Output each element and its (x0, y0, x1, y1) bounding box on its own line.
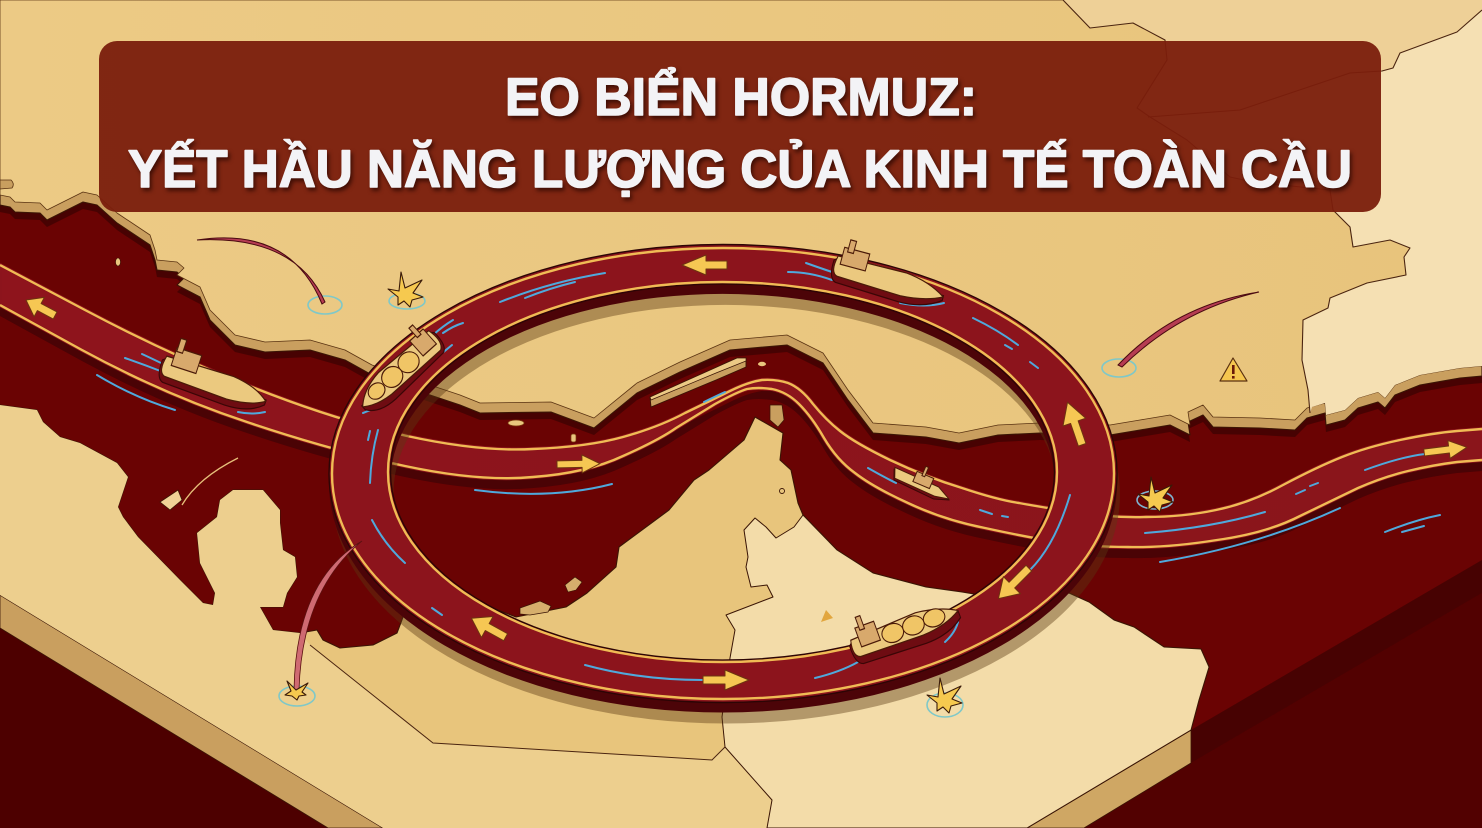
ship: tanker on west lane (155, 335, 276, 417)
explosion with missile trail: south-west (279, 541, 362, 706)
arrow: west lane heading north-west (21, 290, 60, 325)
ship: patrol vessel on east lane (889, 455, 957, 505)
impact marker with missile trail: north-east (1102, 292, 1259, 377)
explosion icon: open sea (1137, 477, 1173, 512)
ship: tanker with tanks on ring left (344, 317, 450, 419)
ring arrow: top, heading west (682, 255, 727, 275)
ship: tanker on ring top (828, 237, 951, 313)
title panel (99, 41, 1381, 212)
shipping lane: west to east road (0, 265, 1482, 558)
ring extruded underside (329, 254, 1117, 712)
road top gold edge (0, 265, 1482, 517)
north coast land: Iran (0, 0, 1482, 450)
ring arrow: lower left, heading north-west (466, 608, 511, 648)
north-east land zones and borders (1063, 0, 1482, 415)
ring arrow: bottom, heading east (703, 670, 749, 690)
title heading text: YẾT HẦU NĂNG LƯỢNG CỦA KINH TẾ TOÀN CẦU (128, 139, 1352, 199)
islands and small land details (116, 258, 833, 622)
explosion icon: south-east land (927, 678, 963, 717)
ship: tanker with tanks on ring bottom (841, 583, 965, 668)
lower deep block south-west (0, 620, 400, 828)
road extruded underside (0, 276, 1482, 558)
ring arrow: right, heading north (1056, 398, 1094, 449)
explosion icon: north coast (388, 272, 425, 309)
title heading text: EO BIỂN HORMUZ: (505, 67, 977, 127)
arrow: inner lane heading east (557, 455, 600, 473)
impact marker with missile trail: north-west (197, 238, 342, 314)
warning triangle icon (1220, 358, 1247, 381)
thin arc over the western gulf (182, 458, 238, 505)
wake streaks on road (97, 354, 1440, 562)
ring arrow: lower right, heading south-west (990, 560, 1037, 607)
title heading text (128, 67, 1352, 199)
ring road around the strait (329, 244, 1117, 702)
wake streaks on ring (363, 263, 1070, 680)
ring shadow on land (332, 266, 1120, 724)
road surface (0, 265, 1482, 547)
arrow: east lane heading east (1423, 438, 1468, 461)
south land: Oman light zone (722, 515, 1209, 828)
lower deep block south-east (1084, 560, 1482, 828)
south land: Arabian Peninsula (0, 405, 1209, 828)
road bottom gold edge (0, 305, 1482, 547)
